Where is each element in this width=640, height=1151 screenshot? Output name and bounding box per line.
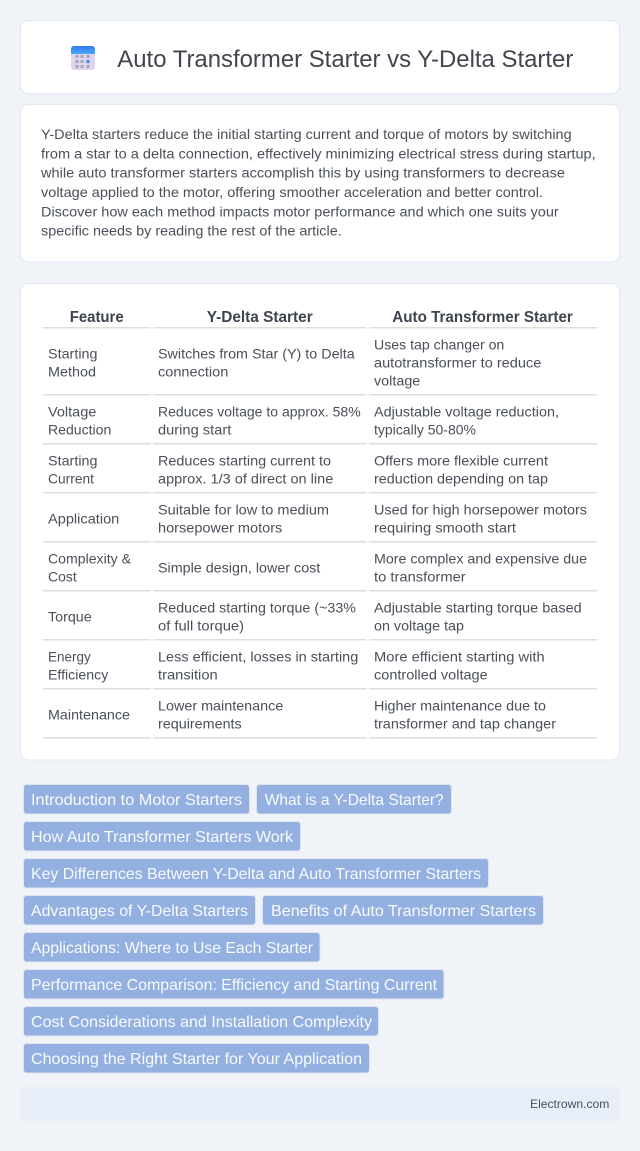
tag: key differences xyxy=(24,858,488,888)
row: voltage reduction: typically 50-80% xyxy=(374,421,476,437)
intro paragraph: specific needs by reading the rest of the article. xyxy=(41,223,342,239)
row: voltage reduction xyxy=(48,403,559,437)
row: voltage reduction: during start xyxy=(158,421,231,437)
row: torque: Reduced starting torque (~33% xyxy=(158,599,356,615)
row: complexity and cost: Cost xyxy=(48,568,77,584)
table header row: Feature xyxy=(70,309,124,326)
row: maintenance xyxy=(48,697,556,731)
row: complexity and cost xyxy=(48,550,587,584)
footer: Electrown.com xyxy=(530,1097,609,1111)
row: complexity and cost: More complex and expensive due xyxy=(374,550,587,566)
intro paragraph: while auto transformer starters accomplish this by using transformers to decrease xyxy=(40,165,565,181)
tag: choosing the right starter: Choosing the Right Starter for Your Application xyxy=(31,1051,362,1068)
row: starting current: Current xyxy=(48,470,94,486)
row: application: Application xyxy=(48,510,119,526)
tag: how auto transformer starters work: How Auto Transformer Starters Work xyxy=(31,829,294,846)
tag: what is y-delta xyxy=(256,784,452,814)
row: energy efficiency: transition xyxy=(158,666,218,682)
intro paragraph: Discover how each method impacts motor performance and which one suits your xyxy=(41,203,559,219)
row: starting current: approx. 1/3 of direct on line xyxy=(158,470,334,486)
row: starting current: Reduces starting current to xyxy=(158,452,331,468)
tag: choosing the right starter xyxy=(24,1044,370,1073)
panel: title header xyxy=(20,20,620,94)
row: torque xyxy=(48,599,582,633)
row: energy efficiency: Energy xyxy=(48,648,91,664)
panel: introduction xyxy=(20,104,620,262)
tag: advantages: Advantages of Y-Delta Starters xyxy=(31,903,248,920)
row: energy efficiency: controlled voltage xyxy=(374,666,488,682)
row: complexity and cost: to transformer xyxy=(374,568,466,584)
table header row: Auto Transformer Starter xyxy=(392,309,573,326)
row: voltage reduction: Reduces voltage to approx. 58% xyxy=(158,403,361,419)
row: application: Used for high horsepower motors xyxy=(374,501,587,517)
tag: performance comparison: Performance Comparison: Efficiency and Starting Current xyxy=(31,977,438,994)
row: torque: Torque xyxy=(48,608,92,624)
tag: key differences: Key Differences Between Y-Delta and Auto Transformer Starters xyxy=(31,866,481,883)
row: starting method: Starting xyxy=(48,345,98,361)
row: maintenance: requirements xyxy=(158,715,242,731)
row: starting method xyxy=(48,336,542,388)
title: Auto Transformer Starter vs Y-Delta Starter xyxy=(117,46,573,73)
tag: introduction: Introduction to Motor Starters xyxy=(31,792,242,809)
row: application xyxy=(48,501,587,535)
icon: calendar grid xyxy=(71,46,95,70)
row: complexity and cost: Complexity & xyxy=(48,550,132,566)
tag: cost considerations: Cost Considerations and Installation Complexity xyxy=(31,1014,372,1031)
row: starting current: Offers more flexible current xyxy=(374,452,548,468)
row: torque: Adjustable starting torque based xyxy=(374,599,582,615)
tag: introduction xyxy=(24,784,250,814)
footer xyxy=(20,1087,620,1121)
row: maintenance: transformer and tap changer xyxy=(374,715,556,731)
row: torque: on voltage tap xyxy=(374,617,464,633)
row: starting current xyxy=(48,452,548,486)
row: voltage reduction: Reduction xyxy=(48,421,111,437)
tag: applications xyxy=(24,932,320,962)
row: starting method: autotransformer to reduce xyxy=(374,354,542,370)
row: starting method: voltage xyxy=(374,372,421,388)
table header row: Y-Delta Starter xyxy=(207,309,313,326)
intro paragraph: Y-Delta starters reduce the initial starting current and torque of motors by switching xyxy=(41,126,572,142)
row: starting method: Method xyxy=(48,363,96,379)
row: complexity and cost: Simple design, lower cost xyxy=(158,559,320,575)
row: torque: of full torque) xyxy=(158,617,244,633)
tag: benefits xyxy=(262,896,544,925)
row: energy efficiency: Less efficient, losses in starting xyxy=(158,648,358,664)
row: application: horsepower motors xyxy=(158,519,282,535)
row: application: requiring smooth start xyxy=(374,519,516,535)
row: energy efficiency xyxy=(48,648,545,682)
intro paragraph: voltage applied to the motor, offering smoother acceleration and better control. xyxy=(41,184,543,200)
row: energy efficiency: More efficient starting with xyxy=(374,648,545,664)
row: energy efficiency: Efficiency xyxy=(48,666,108,682)
row: maintenance: Lower maintenance xyxy=(158,697,284,713)
intro paragraph: from a star to a delta connection, effectively minimizing electrical stress during startup, xyxy=(41,145,596,161)
row: application: Suitable for low to medium xyxy=(158,501,329,517)
panel: comparison table xyxy=(20,284,620,760)
intro paragraph xyxy=(40,126,596,239)
row: starting current: reduction depending on tap xyxy=(374,470,548,486)
row: starting method: Uses tap changer on xyxy=(374,336,504,352)
row: voltage reduction: Voltage xyxy=(48,403,97,419)
tag: cost considerations xyxy=(24,1006,378,1036)
table header row xyxy=(70,309,573,326)
tag: what is y-delta: What is a Y-Delta Starter? xyxy=(265,792,444,809)
row: starting current: Starting xyxy=(48,452,98,468)
row: voltage reduction: Adjustable voltage reduction, xyxy=(374,403,559,419)
tag: how auto transformer starters work xyxy=(24,822,300,851)
tag: advantages xyxy=(24,896,256,925)
row: maintenance: Higher maintenance due to xyxy=(374,697,546,713)
tag list: article sections xyxy=(24,784,544,1073)
row: starting method: Switches from Star (Y) to Delta xyxy=(158,345,355,361)
row: starting method: connection xyxy=(158,363,228,379)
tag: benefits: Benefits of Auto Transformer Starters xyxy=(271,903,536,920)
row: maintenance: Maintenance xyxy=(48,706,130,722)
tag: performance comparison xyxy=(24,970,444,999)
tag: applications: Applications: Where to Use Each Starter xyxy=(31,940,314,957)
